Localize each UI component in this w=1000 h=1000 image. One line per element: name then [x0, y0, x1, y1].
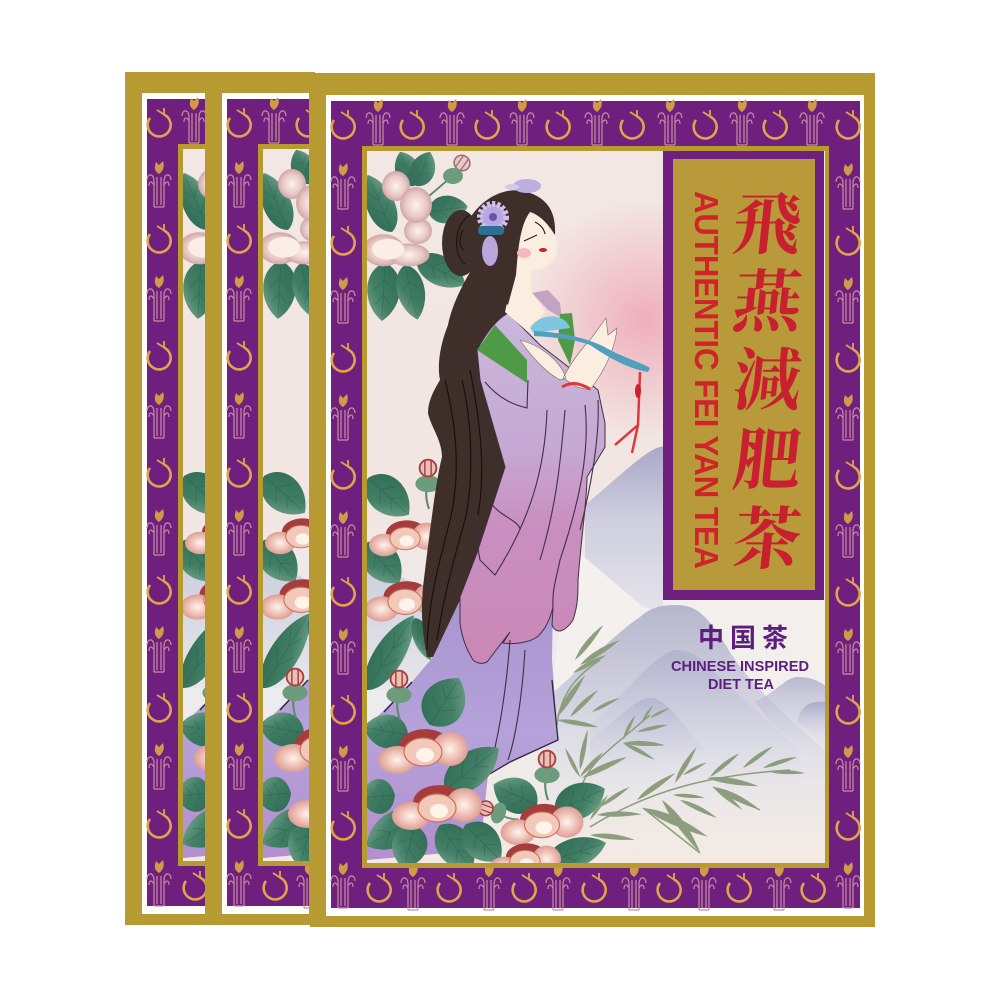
white mat: [326, 95, 864, 916]
flowers bottom: [358, 667, 612, 880]
hair strands: [427, 370, 482, 650]
arms and hand: [520, 318, 617, 390]
vertical Chinese title: 減: [729, 343, 805, 419]
robe fold lines: [477, 380, 598, 760]
vertical Chinese title: 飛: [729, 187, 805, 263]
vertical English title: AUTHENTIC FEI YAN TEA: [688, 191, 725, 569]
skirt outline: [384, 680, 558, 775]
vertical Chinese title: [729, 187, 810, 578]
bamboo: [554, 623, 805, 854]
blue ladle: [530, 316, 650, 372]
vertical Chinese title: 燕: [729, 265, 810, 341]
front card face: [326, 95, 864, 916]
title plaque: [663, 151, 824, 600]
subtitle: 中国茶: [698, 623, 794, 653]
hair bun: [442, 210, 480, 276]
vertical Chinese title: 茶: [729, 502, 805, 578]
mountains: [367, 440, 830, 860]
subtitle: CHINESE INSPIRED: [671, 658, 809, 675]
back card: left sachet: [125, 72, 205, 925]
hair crown: [470, 190, 555, 305]
robe: [460, 313, 605, 663]
red tassel: [615, 372, 641, 453]
gold inner frame: [362, 146, 829, 868]
long hair: [422, 261, 507, 657]
purple ornamental border: [331, 99, 860, 910]
subtitle: DIET TEA: [708, 676, 774, 693]
red bracelet: [562, 383, 590, 389]
illustration panel: [353, 147, 830, 880]
neck and face: [505, 215, 557, 332]
sky background: [367, 151, 825, 863]
skirt: [367, 600, 558, 860]
pink collar: [532, 290, 562, 318]
back card: middle sachet: [222, 72, 315, 914]
lady figure: [367, 179, 650, 860]
green lapels: [477, 313, 575, 383]
subtitle: [671, 623, 809, 693]
facial details: [517, 222, 547, 258]
flowers top: [355, 147, 473, 323]
hair flowers: [478, 179, 541, 266]
flowers middle: [353, 460, 446, 698]
vertical Chinese title: 肥: [729, 423, 805, 499]
front card gold backing: [310, 73, 875, 927]
